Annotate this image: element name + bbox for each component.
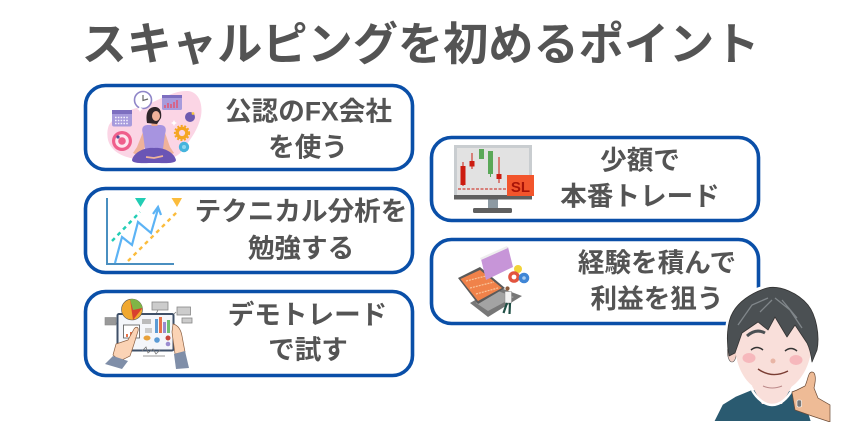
icon: tablet with charts	[105, 299, 192, 369]
icon: meditating woman	[107, 91, 201, 163]
label: 本番トレード	[560, 182, 720, 212]
label: 利益を狙う	[591, 284, 723, 314]
label: デモトレード	[228, 300, 387, 330]
label	[225, 96, 392, 162]
character: smiling man with thumbs up	[713, 285, 830, 422]
icon: monitor with stop loss	[454, 145, 534, 213]
icon: monitor with stop loss: SL	[511, 179, 530, 196]
panel: study technical analysis	[86, 188, 412, 272]
icon: trend chart	[107, 198, 182, 264]
label: を使う	[268, 132, 348, 162]
label: テクニカル分析を	[195, 196, 407, 226]
label	[228, 300, 387, 365]
label	[195, 196, 407, 264]
label	[560, 146, 720, 212]
label: で試す	[268, 335, 348, 365]
panel: small live trade	[432, 138, 758, 220]
title: スキャルピングを初めるポイント	[82, 19, 759, 70]
icon: laptop with gears	[458, 246, 529, 317]
label: 経験を積んで	[578, 248, 736, 278]
label: 公認のFX会社	[225, 96, 392, 126]
label	[578, 248, 736, 314]
label: 少額で	[600, 146, 680, 176]
label: 勉強する	[248, 234, 354, 264]
panel: experience and profit	[432, 240, 758, 324]
panel: demo trade	[86, 292, 412, 376]
panel: licensed FX broker	[86, 86, 412, 170]
